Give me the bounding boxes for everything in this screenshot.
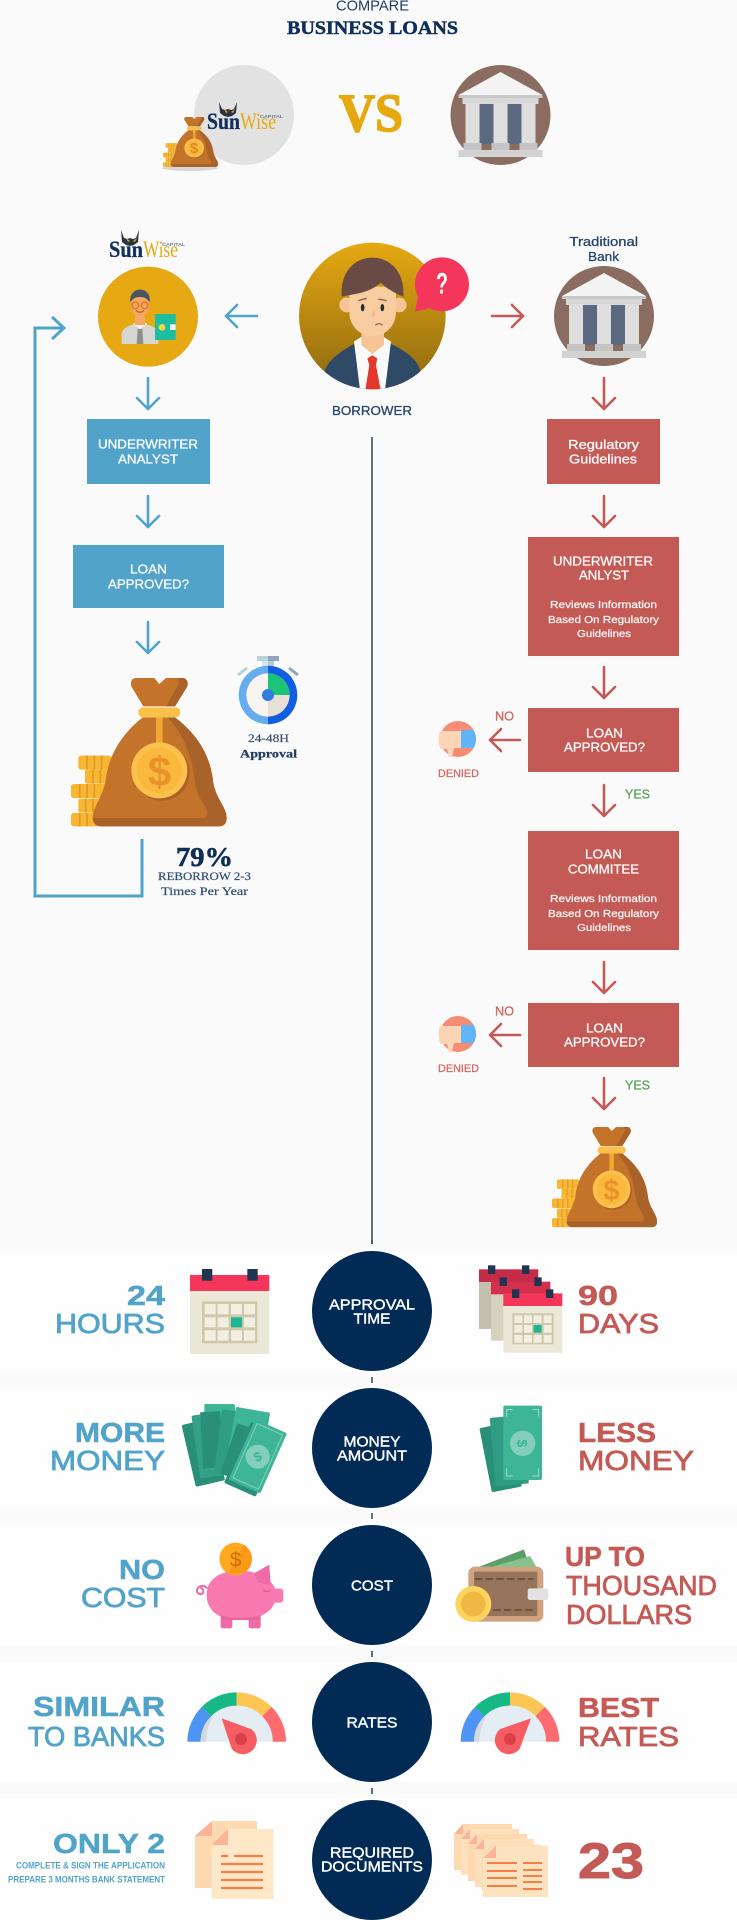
label: yes: YES	[625, 788, 650, 802]
label: denied: DENIED	[438, 768, 479, 780]
box: underwriter anlyst: Based On Regulatory	[548, 615, 659, 626]
arrow: to money bag	[137, 622, 159, 653]
icon: fan of bills: $	[251, 1448, 265, 1465]
arrow: to second denied	[490, 1024, 520, 1046]
arrow: to loan approved	[137, 496, 159, 527]
text: up to thousand dollars: UP TO	[565, 1541, 645, 1572]
box: loan approved: LOAN	[130, 562, 167, 576]
text: 23: 23	[578, 1833, 644, 1889]
text: 79 percent reborrow: 79%	[176, 842, 233, 872]
box: underwriter anlyst	[528, 537, 679, 656]
sunwise logo	[109, 230, 186, 262]
box: underwriter anlyst: Guidelines	[577, 629, 631, 640]
icon: gauge left	[187, 1692, 286, 1754]
icon: few bills: $	[515, 1439, 531, 1447]
icon: sunwise logo circle with money bag: $	[190, 140, 199, 157]
box: loan approved second	[528, 1003, 679, 1067]
box: underwriter analyst: UNDERWRITER	[98, 438, 198, 452]
VS heading: VS	[339, 83, 403, 143]
icon: money bag	[71, 678, 227, 826]
icon: piggy bank	[197, 1543, 283, 1628]
text: only 2: PREPARE 3 MONTHS BANK STATEMENT	[8, 1874, 165, 1884]
text: similar to banks: TO BANKS	[28, 1721, 165, 1752]
circle: approval time: APPROVAL	[329, 1296, 415, 1314]
arrow: reborrow loop	[35, 317, 142, 896]
text: 90 days: DAYS	[578, 1308, 659, 1339]
circle: cost	[312, 1525, 432, 1645]
icon: money bag: $	[148, 748, 171, 795]
text: 90 days: 90	[578, 1280, 618, 1311]
icon: gauge right	[461, 1692, 559, 1754]
text: no cost: COST	[81, 1582, 165, 1613]
box: loan committee: LOAN	[585, 848, 622, 862]
circle: rates: RATES	[346, 1714, 398, 1732]
text: similar to banks	[28, 1691, 165, 1752]
box: loan committee: Reviews Information	[550, 894, 657, 905]
label: traditional bank: Traditional	[570, 234, 638, 249]
box: regulatory guidelines: Regulatory	[568, 438, 640, 452]
label: no second: NO	[495, 1004, 514, 1018]
text: no cost	[81, 1554, 165, 1613]
text: approval time: Approval	[240, 746, 298, 760]
box: regulatory guidelines	[547, 419, 660, 484]
icon: money bag result	[552, 1127, 657, 1227]
circle: required documents	[312, 1800, 432, 1920]
box: loan approved second: APPROVED?	[564, 1036, 645, 1050]
circle: cost: COST	[351, 1578, 393, 1594]
arrow: borrower to bank	[492, 305, 523, 327]
icon: fan of bills	[182, 1404, 287, 1497]
icon: borrower: ?	[436, 267, 448, 300]
icon: wallet	[455, 1549, 548, 1622]
icon: piggy bank: $	[230, 1549, 242, 1572]
title	[287, 0, 458, 39]
icon: many documents	[454, 1824, 548, 1897]
timeline connectors	[371, 1240, 373, 1794]
text: 79 percent reborrow: Times Per Year	[161, 884, 248, 898]
box: underwriter anlyst: Reviews Information	[550, 600, 657, 611]
text: 24 hours: HOURS	[55, 1308, 165, 1339]
label: denied second: DENIED	[438, 1063, 479, 1075]
row: approval time	[55, 1251, 659, 1371]
title: BUSINESS LOANS	[287, 18, 458, 39]
box: loan approved	[73, 545, 224, 608]
icon: denied thumb second	[438, 1016, 476, 1052]
icon: denied thumb	[438, 721, 476, 757]
icon: sunwise logo circle with money bag	[162, 65, 294, 171]
circle: required documents: DOCUMENTS	[321, 1858, 423, 1876]
arrow: to guidelines	[593, 378, 615, 409]
label: traditional bank	[570, 234, 638, 264]
circle: rates	[312, 1662, 432, 1782]
row: cost	[81, 1525, 717, 1645]
text: less money: LESS	[578, 1417, 656, 1448]
circle: required documents: REQUIRED	[330, 1844, 414, 1862]
flow: traditional bank	[438, 378, 679, 1227]
icon: calendar	[190, 1269, 269, 1354]
icon: borrower	[299, 243, 469, 390]
arrow: to loan approved	[593, 667, 615, 698]
icon: sunwise logo circle with money bag: CAPITAL	[260, 114, 284, 119]
text: only 2	[8, 1828, 165, 1884]
row: rates	[28, 1662, 679, 1782]
row: money amount	[50, 1388, 694, 1508]
arrow: yes to money	[593, 1078, 615, 1109]
text: more money: MORE	[75, 1417, 165, 1448]
text: similar to banks: SIMILAR	[33, 1691, 165, 1722]
comparison row bands	[0, 1252, 737, 1920]
arrow: to underwriter	[593, 496, 615, 527]
flow: sunwise	[35, 317, 298, 898]
box: loan approved first	[528, 708, 679, 772]
text: up to thousand dollars	[565, 1541, 717, 1630]
center timeline	[371, 437, 373, 1244]
text: approval time	[240, 731, 298, 760]
row: required documents	[8, 1800, 644, 1920]
text: up to thousand dollars: DOLLARS	[566, 1599, 692, 1630]
label: traditional bank: Bank	[588, 249, 620, 264]
text: best rates: BEST	[578, 1692, 659, 1723]
arrow: to second approval	[593, 962, 615, 993]
text: more money	[50, 1417, 165, 1476]
sunwise logo: Wise	[143, 237, 178, 262]
text: up to thousand dollars: THOUSAND	[566, 1570, 717, 1601]
box: underwriter anlyst: ANLYST	[579, 568, 629, 582]
circle: approval time	[312, 1251, 432, 1371]
circle: money amount: AMOUNT	[337, 1448, 407, 1464]
box: loan approved: APPROVED?	[108, 578, 189, 592]
text: only 2: COMPLETE & SIGN THE APPLICATION	[16, 1860, 165, 1870]
circle: money amount	[312, 1388, 432, 1508]
box: underwriter analyst	[87, 419, 210, 484]
text: 79 percent reborrow: REBORROW 2-3	[158, 869, 251, 883]
icon: sunwise logo circle with money bag: Sun	[207, 109, 240, 134]
icon: stacked calendars	[479, 1265, 562, 1353]
circle: approval time: TIME	[354, 1310, 390, 1328]
label: borrower: BORROWER	[332, 403, 412, 418]
text: more money: MONEY	[50, 1445, 165, 1476]
text: approval time: 24-48H	[248, 731, 289, 745]
text: 24 hours	[55, 1280, 166, 1339]
box: loan approved second: LOAN	[586, 1022, 623, 1036]
circle: money amount: MONEY	[344, 1434, 400, 1450]
text: only 2: ONLY 2	[53, 1828, 165, 1859]
text: 24 hours: 24	[127, 1280, 166, 1311]
icon: bank circle top	[450, 65, 550, 165]
label: yes second: YES	[625, 1078, 650, 1092]
box: loan committee: Based On Regulatory	[548, 909, 659, 920]
text: best rates	[578, 1692, 679, 1752]
box: loan approved first: APPROVED?	[564, 740, 645, 754]
arrow: to underwriter	[137, 378, 159, 409]
icon: few bills	[479, 1406, 542, 1492]
box: underwriter analyst: ANALYST	[118, 452, 178, 466]
arrow: borrower to sunwise	[226, 305, 257, 327]
icon: bank circle flow	[554, 266, 654, 366]
box: loan committee: Guidelines	[577, 923, 631, 934]
text: less money: MONEY	[578, 1445, 694, 1476]
icon: sunwise underwriter circle	[98, 267, 198, 367]
text: no cost: NO	[119, 1554, 165, 1585]
icon: money bag result: $	[603, 1175, 620, 1207]
box: loan committee: COMMITEE	[568, 862, 639, 876]
box: regulatory guidelines: Guidelines	[569, 452, 637, 466]
icon: stopwatch	[238, 656, 298, 724]
label: no: NO	[495, 710, 514, 724]
arrow: to denied	[490, 729, 520, 751]
text: 90 days	[578, 1280, 659, 1339]
box: loan committee	[528, 831, 679, 950]
icon: sunwise logo circle with money bag: Wise	[240, 109, 276, 134]
text: best rates: RATES	[578, 1721, 679, 1752]
text: 79 percent reborrow	[158, 842, 251, 898]
text: less money	[578, 1417, 694, 1476]
sunwise logo: CAPITAL	[162, 242, 186, 247]
box: underwriter anlyst: UNDERWRITER	[553, 554, 653, 568]
arrow: yes to committee	[593, 785, 615, 816]
icon: two documents	[195, 1821, 274, 1899]
box: loan approved first: LOAN	[586, 726, 623, 740]
sunwise logo: Sun	[109, 237, 143, 262]
